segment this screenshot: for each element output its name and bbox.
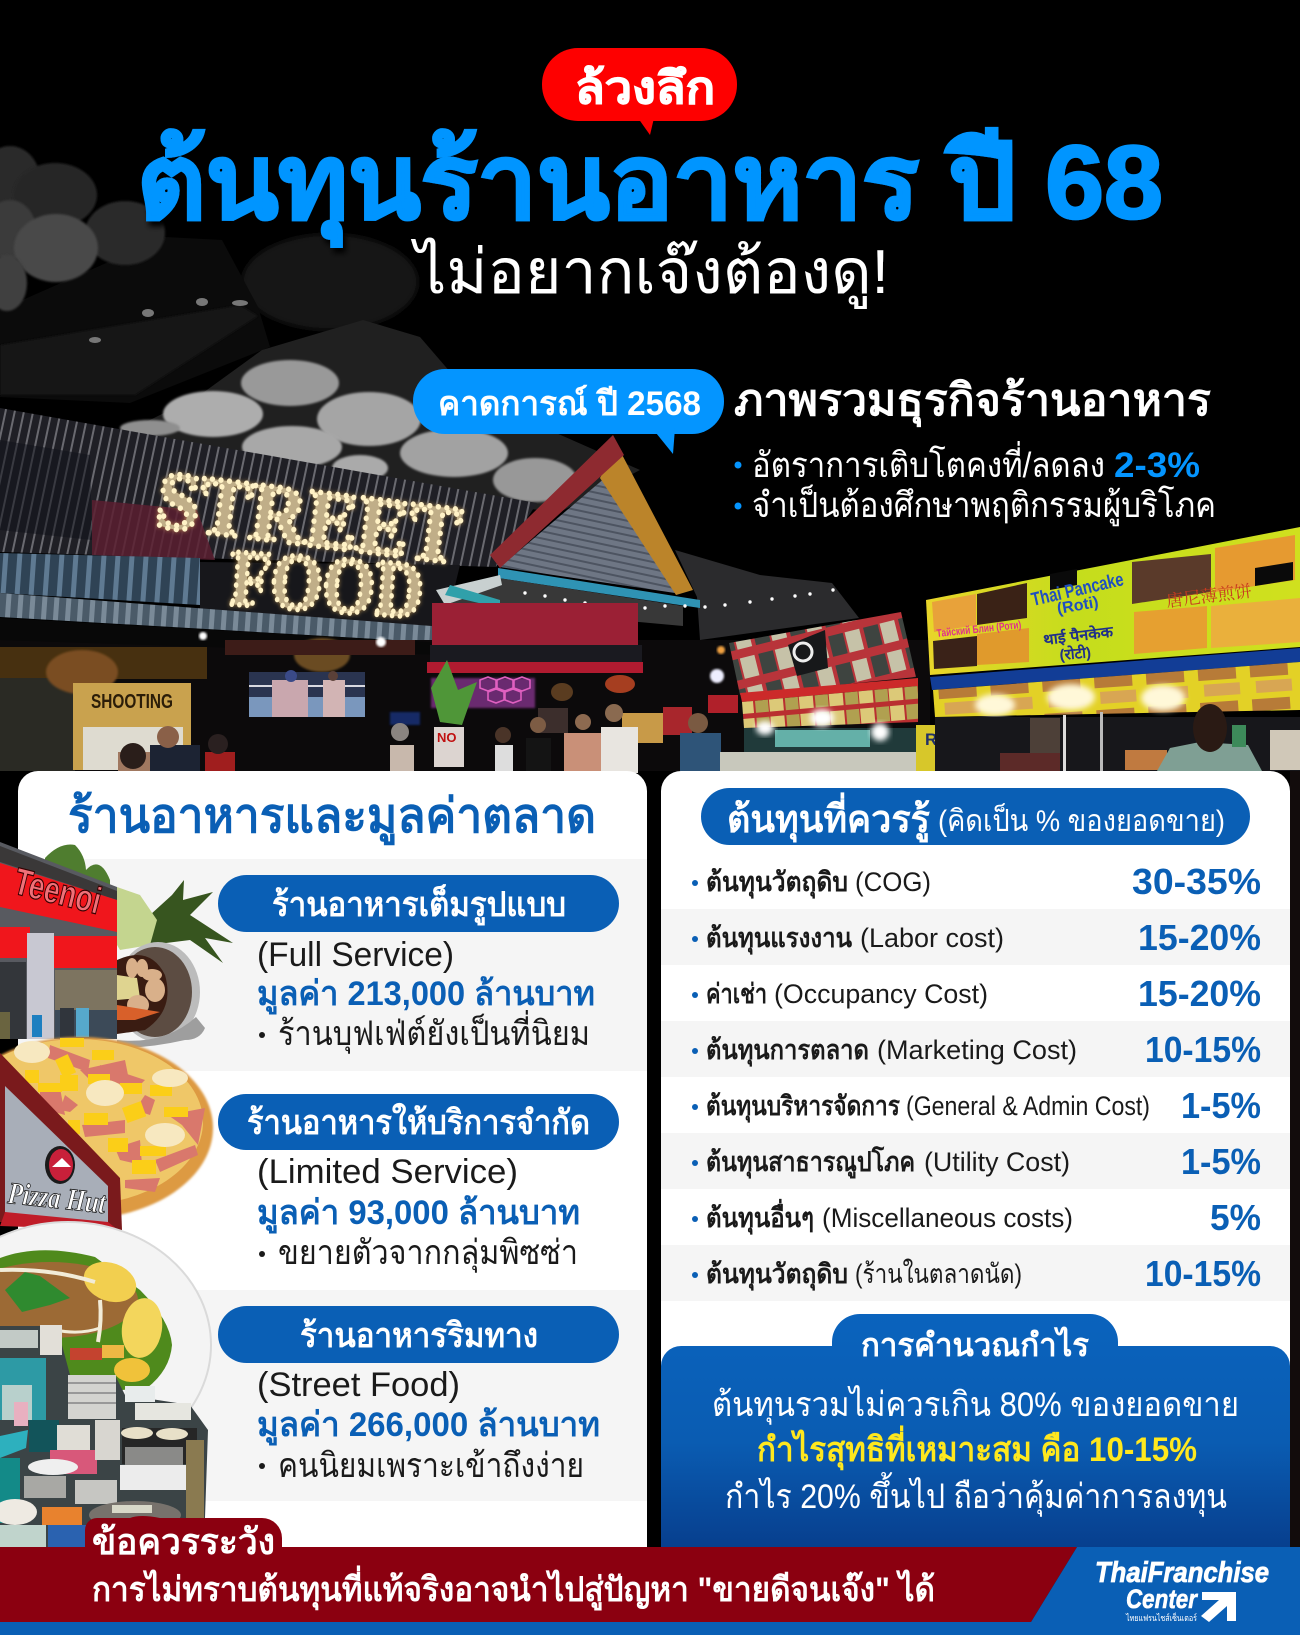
cost row: labor: (Labor cost): [860, 923, 1004, 953]
cost row: miscellaneous: (Miscellaneous costs): [822, 1203, 1073, 1233]
crowd: [118, 704, 721, 775]
panel: costs to know: [661, 771, 1290, 1547]
footer band: [0, 1516, 1300, 1635]
cost row: raw materials: (COG): [855, 867, 931, 897]
cost row: miscellaneous: ต้นทุนอื่นๆ: [706, 1198, 814, 1235]
image: pizza with pineapple and ham: [0, 1037, 213, 1219]
cost row: raw materials at markets: ต้นทุนวัตถุดิบ: [706, 1259, 848, 1291]
cost row: general and admin: ต้นทุนบริหารจัดการ: [706, 1091, 900, 1123]
no sign: [434, 727, 464, 767]
image: Pizza Hut sign: [0, 1053, 122, 1230]
cost row: labor: 15-20%: [1138, 917, 1261, 958]
no sign: NO: [437, 730, 456, 745]
panel heading: ร้านอาหารและมูลค่าตลาด: [68, 790, 596, 846]
menu boards and display counter: Roti: [925, 730, 958, 749]
image: Teenoi restaurant front: Teenoi: [10, 861, 105, 923]
cost row: utilities: 1-5%: [1181, 1141, 1261, 1182]
warning: caution note: ข้อควรระวัง: [92, 1521, 275, 1562]
segment: limited service: (Limited Service): [257, 1153, 518, 1191]
cost row: labor: [692, 917, 1261, 958]
segment: street food: มูลค่า 266,000 ล้านบาท: [257, 1406, 600, 1446]
segment: limited service: [218, 1094, 619, 1273]
segment: street food: คนนิยมเพราะเข้าถึงง่าย: [278, 1447, 584, 1485]
cost row: raw materials at markets: (ร้านในตลาดนัด): [855, 1258, 1022, 1289]
icon: logo arrow: [1201, 1592, 1236, 1622]
subtitle: ไม่อยากเจ๊งต้องดู!: [410, 237, 889, 309]
cost row: marketing: ต้นทุนการตลาด: [706, 1035, 869, 1067]
logo: ThaiFranchise Center: [1095, 1557, 1269, 1623]
segment: street food: (Street Food): [257, 1366, 460, 1404]
stall sign: Thai pancake roti: Тайский Блин (Роти): [936, 619, 1022, 640]
pill: full service: [218, 875, 619, 932]
bullet list: overview points: อัตราการเติบโตคงที่/ลดลง: [752, 441, 1105, 485]
badge: red speech bubble: ล้วงลึก: [575, 64, 715, 113]
cost row: raw materials at markets: 10-15%: [1145, 1253, 1261, 1294]
bullet list: overview points: 2-3%: [1114, 446, 1200, 485]
cost row: marketing: [692, 1029, 1261, 1070]
cost row: general and admin: [692, 1085, 1261, 1126]
tv screen: [249, 670, 365, 717]
heading: business overview: ภาพรวมธุรกิจร้านอาหาร: [734, 376, 1211, 428]
sign: STREET FOOD: FOOD: [227, 534, 426, 635]
griddle and dumplings in greyscale: [0, 146, 640, 512]
image: street food stall clutter: [0, 1325, 208, 1547]
logo: ThaiFranchise Center: Center: [1126, 1584, 1198, 1614]
stall sign: Thai pancake roti: (रोटी): [1059, 643, 1092, 664]
box: profit calculation: [661, 1314, 1290, 1547]
cost row: utilities: [692, 1141, 1261, 1182]
image: hot pot with vegetables: [116, 880, 233, 1048]
image: Pizza Hut sign: Pizza Hut: [5, 1175, 108, 1220]
image: Teenoi restaurant front: [0, 842, 117, 1039]
stall sign: Thai pancake roti: (Roti): [1056, 594, 1100, 618]
stall sign: Thai pancake roti: [926, 527, 1300, 771]
pill: limited service: [218, 1094, 619, 1150]
title: ต้นทุนร้านอาหาร ปี 68: [137, 125, 1163, 247]
cost row: miscellaneous: 5%: [1210, 1197, 1261, 1238]
bullet list: overview points: จำเป็นต้องศึกษาพฤติกรรมผู้บริโภค: [752, 484, 1216, 526]
cost row: raw materials: ต้นทุนวัตถุดิบ: [706, 867, 848, 899]
pill: full service: ร้านอาหารเต็มรูปแบบ: [272, 883, 566, 926]
menu boards and display counter: [720, 612, 1008, 772]
cost row: raw materials: 30-35%: [1132, 861, 1261, 902]
badge: forecast year 2568: คาดการณ์ ปี 2568: [438, 384, 701, 423]
segment: street food: [218, 1306, 619, 1485]
stall sign: Thai pancake roti: Thai Pancake: [1029, 569, 1126, 611]
logo: ThaiFranchise Center: ThaiFranchise: [1095, 1557, 1269, 1589]
cost row: marketing: (Marketing Cost): [877, 1035, 1077, 1065]
cost row: utilities: (Utility Cost): [924, 1147, 1070, 1177]
segment: full service: (Full Service): [257, 936, 454, 974]
logo: ThaiFranchise Center: ไทยแฟรนไชส์เซ็นเตอร์: [1125, 1611, 1197, 1623]
bullet list: overview points: [734, 441, 1216, 526]
box: profit calculation: กำไรสุทธิที่เหมาะสม คือ 10-15%: [757, 1425, 1197, 1471]
cost row: rent: (Occupancy Cost): [774, 979, 988, 1009]
segment: limited service: ขยายตัวจากกลุ่มพิซซ่า: [278, 1234, 578, 1273]
forecast section: [413, 369, 1216, 526]
box: profit calculation: การคำนวณกำไร: [861, 1326, 1089, 1363]
warning: caution note: การไม่ทราบต้นทุนที่แท้จริงอาจนำไปสู่ปัญหา "ขายดีจนเจ๊ง" ได้: [92, 1565, 935, 1611]
strips beside the panels: [647, 771, 1300, 1547]
image: pad thai on a white plate: [0, 1222, 211, 1468]
sign: STREET FOOD: [152, 454, 466, 635]
shooting range poster: SHOOTING: [91, 691, 173, 713]
cost row: rent: [692, 973, 1261, 1014]
badge: red speech bubble: [542, 48, 737, 135]
warning: caution note: [85, 1516, 935, 1611]
pill heading: costs as percent of sales: ต้นทุนที่ควรรู้: [727, 792, 931, 843]
interior of market with tv and crowd: [0, 603, 930, 775]
badge: forecast year 2568: [413, 369, 724, 454]
pill: street food: [218, 1306, 619, 1363]
cost row: raw materials at markets: [692, 1253, 1261, 1294]
segment: full service: [218, 875, 619, 1054]
cost row: general and admin: (General & Admin Cost): [906, 1091, 1150, 1121]
cost row: miscellaneous: [692, 1197, 1261, 1238]
cost row: marketing: 10-15%: [1145, 1029, 1261, 1070]
pill heading: costs as percent of sales: [701, 788, 1250, 845]
sign: STREET FOOD: STREET: [152, 454, 466, 581]
cost row: general and admin: 1-5%: [1181, 1085, 1261, 1126]
market roof: [0, 408, 859, 643]
pill: limited service: ร้านอาหารให้บริการจำกัด: [247, 1102, 590, 1142]
cost row: raw materials: [692, 861, 1261, 902]
segment: full service: ร้านบุฟเฟ่ต์ยังเป็นที่นิยม: [278, 1010, 590, 1054]
cost row: rent: 15-20%: [1138, 973, 1261, 1014]
segment: full service: มูลค่า 213,000 ล้านบาท: [257, 975, 595, 1015]
cost row: rent: ค่าเช่า: [706, 979, 767, 1009]
segment: limited service: มูลค่า 93,000 ล้านบาท: [257, 1194, 580, 1234]
cost row: labor: ต้นทุนแรงงาน: [706, 923, 852, 955]
box: profit calculation: ต้นทุนรวมไม่ควรเกิน 80% ของยอดขาย: [712, 1385, 1239, 1425]
shooting range poster: [73, 683, 191, 770]
stall sign: Thai pancake roti: 唐尼薄煎饼: [1165, 577, 1253, 612]
panel: restaurants and market value: [18, 771, 647, 1547]
stall sign: Thai pancake roti: थाई पैनकेक: [1042, 622, 1116, 649]
box: profit calculation: กำไร 20% ขึ้นไป ถือว่าคุ้มค่าการลงทุน: [725, 1472, 1227, 1517]
pill heading: costs as percent of sales: (คิดเป็น % ของยอดขาย): [938, 802, 1225, 838]
cost row: utilities: ต้นทุนสาธารณูปโภค: [706, 1145, 915, 1179]
pill: street food: ร้านอาหารริมทาง: [300, 1317, 538, 1355]
